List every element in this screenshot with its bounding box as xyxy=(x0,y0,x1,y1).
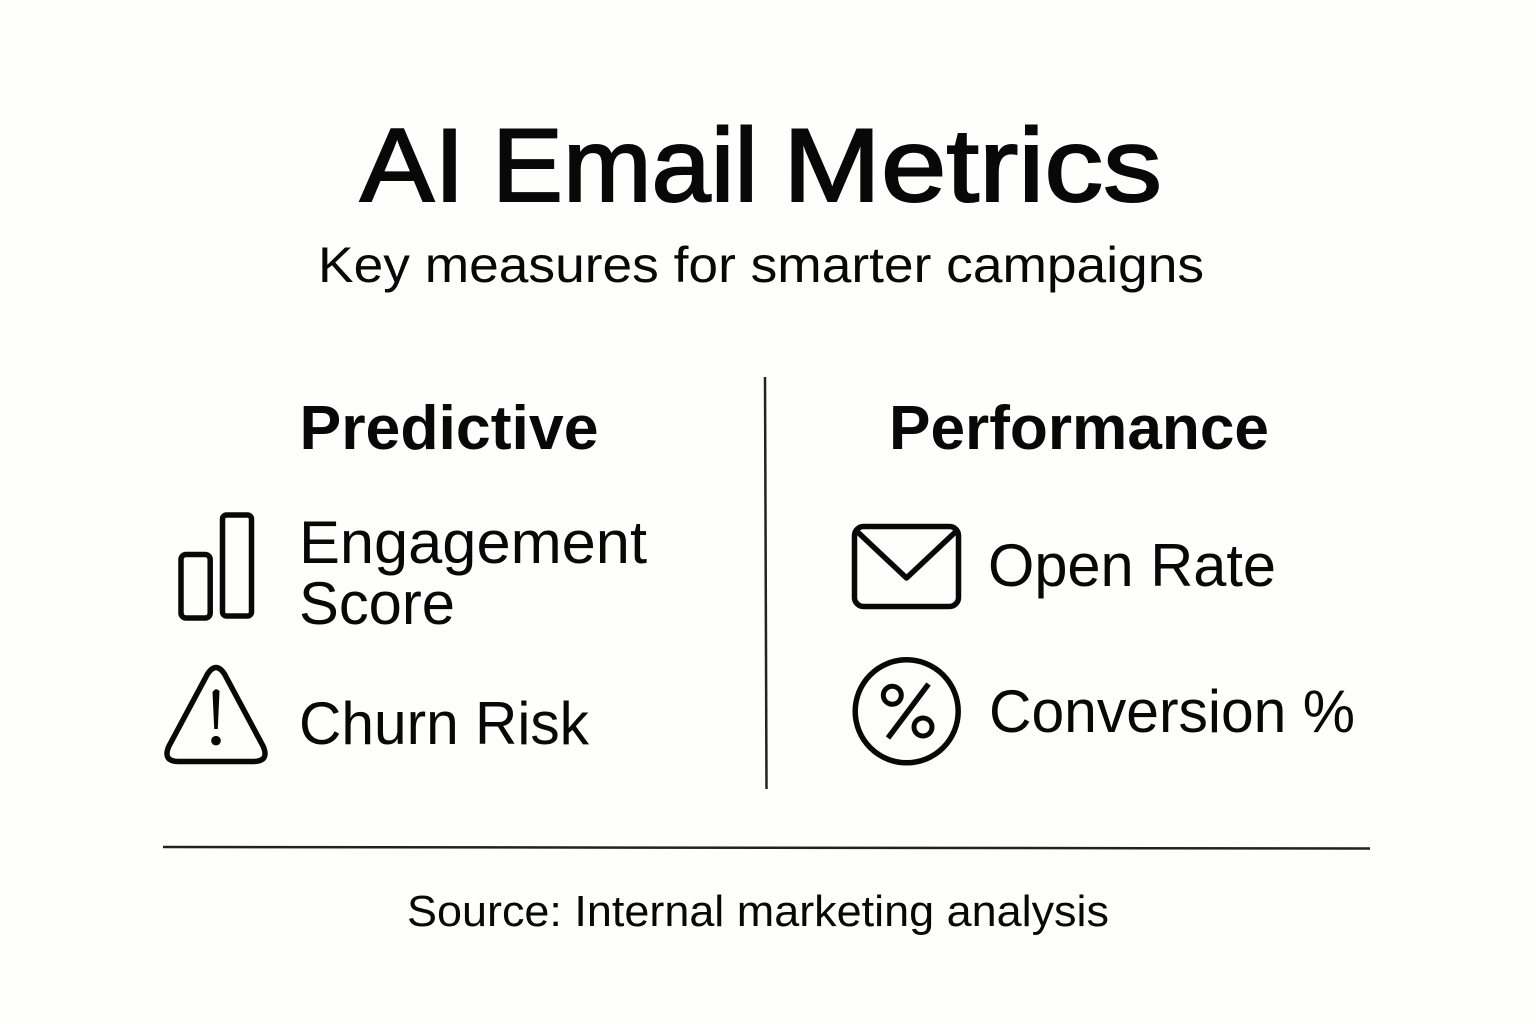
horizontal divider xyxy=(163,847,1370,848)
vertical divider xyxy=(765,377,766,789)
subtitle: Key measures for smarter campaigns xyxy=(318,237,1204,293)
label: open rate: Open Rate xyxy=(988,532,1276,599)
label: engagement score: Engagement xyxy=(299,509,647,576)
source note: Source: Internal marketing analysis xyxy=(407,887,1109,936)
label: engagement score: Score xyxy=(299,570,455,637)
label: engagement score xyxy=(299,509,647,637)
label: conversion: Conversion % xyxy=(989,678,1355,745)
panel: performance xyxy=(854,394,1355,763)
title: AI xyxy=(360,108,465,224)
heading: performance: Performance xyxy=(889,394,1269,463)
heading: predictive: Predictive xyxy=(300,394,598,463)
panel: predictive xyxy=(167,394,647,762)
label: churn risk: Churn Risk xyxy=(299,690,590,757)
title xyxy=(360,108,1162,224)
icon: envelope xyxy=(854,526,958,606)
title: Metrics xyxy=(783,108,1162,224)
title: Email xyxy=(492,108,758,224)
icon: percent circle xyxy=(855,660,958,763)
icon: bar chart xyxy=(181,515,252,618)
icon: warning triangle xyxy=(167,668,265,762)
